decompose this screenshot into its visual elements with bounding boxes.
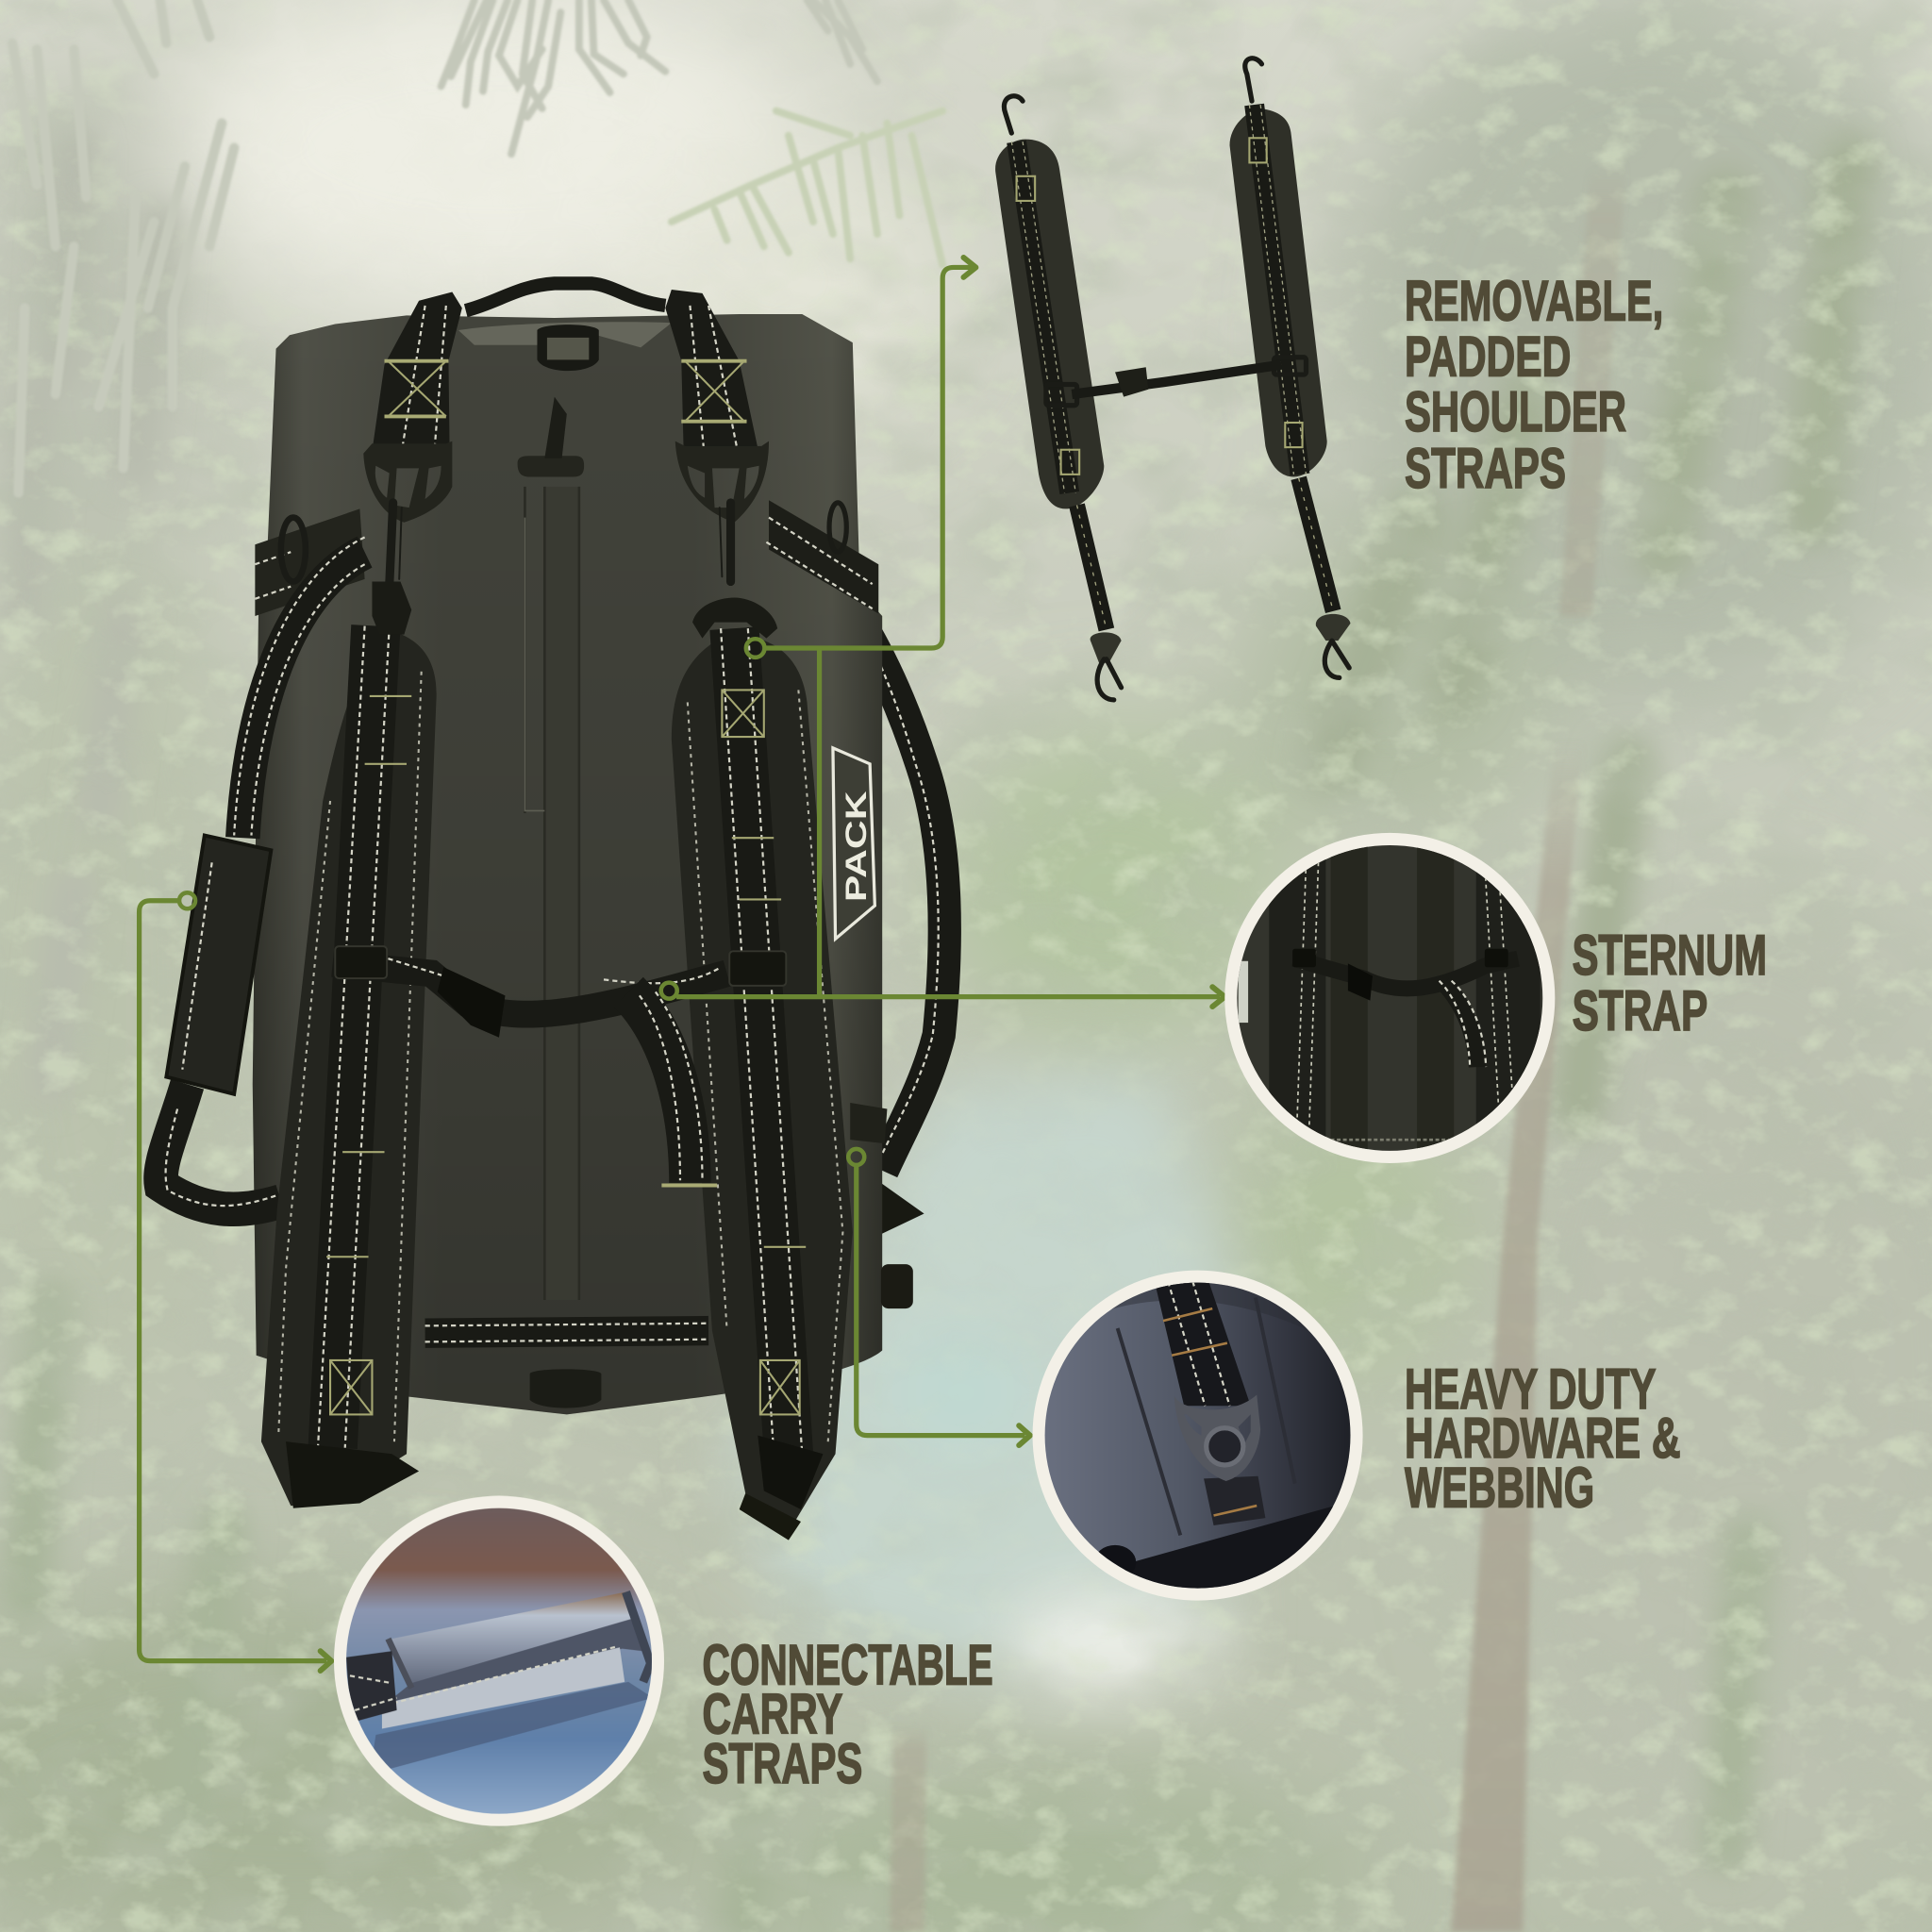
connector: shoulder straps xyxy=(746,258,975,998)
sternum strap and buckle xyxy=(333,946,786,1185)
tree trunks xyxy=(890,160,1626,1932)
label: removable padded shoulder straps: PADDED xyxy=(1405,325,1571,388)
circle: connectable carry straps detail xyxy=(334,1496,664,1826)
label: connectable carry straps xyxy=(702,1633,993,1795)
side webbing and hardware on bag xyxy=(255,500,913,1408)
label: removable padded shoulder straps: SHOULDER xyxy=(1405,380,1626,443)
circle: sternum strap detail xyxy=(1224,833,1558,1171)
Pack logo on bag xyxy=(833,748,874,939)
label: sternum strap xyxy=(1573,924,1767,1042)
connecting sternum strap xyxy=(1072,365,1281,397)
connector: sternum strap xyxy=(661,983,1224,1007)
right strap pad xyxy=(1230,58,1351,677)
backpack photo xyxy=(160,283,944,1541)
connector: hardware xyxy=(848,1149,1030,1445)
left shoulder pad xyxy=(261,292,462,1508)
label: heavy duty hardware and webbing: HEAVY DUTY xyxy=(1405,1357,1656,1421)
label: sternum strap: STERNUM xyxy=(1573,924,1767,987)
circle: hardware and webbing detail xyxy=(1033,1271,1363,1602)
centre zipper xyxy=(525,487,579,1300)
label: heavy duty hardware and webbing xyxy=(1405,1357,1681,1519)
label: removable padded shoulder straps: REMOVABLE, xyxy=(1405,270,1663,333)
connector: carry straps xyxy=(140,892,331,1671)
Pack logo on bag: PACK xyxy=(840,791,873,902)
top fold highlight xyxy=(458,322,672,347)
removable shoulder straps photo xyxy=(995,58,1351,700)
label: connectable carry straps: STRAPS xyxy=(702,1732,862,1795)
connector lines and arrows xyxy=(140,258,1224,1671)
right shoulder pad xyxy=(665,290,853,1541)
left carry strap with padded sleeve xyxy=(160,537,365,1209)
conifer branches xyxy=(12,0,942,492)
label: connectable carry straps: CONNECTABLE xyxy=(702,1633,993,1696)
right carry strap xyxy=(772,515,944,1239)
drybag body xyxy=(253,314,882,1414)
label: heavy duty hardware and webbing: HARDWARE & xyxy=(1405,1407,1681,1470)
label: removable padded shoulder straps xyxy=(1405,270,1663,500)
label: removable padded shoulder straps: STRAPS xyxy=(1405,437,1566,500)
label: connectable carry straps: CARRY xyxy=(702,1683,842,1746)
top handle and D-ring xyxy=(466,283,665,476)
label: sternum strap: STRAP xyxy=(1573,979,1707,1042)
label: heavy duty hardware and webbing: WEBBING xyxy=(1405,1456,1594,1519)
left strap pad xyxy=(995,96,1122,700)
